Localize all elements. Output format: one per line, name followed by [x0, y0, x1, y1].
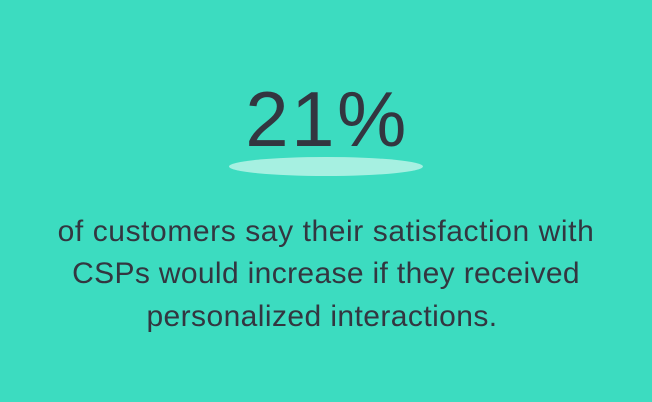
- title: 21% statistic: 21%: [245, 75, 409, 163]
- text block: description: CSPs would increase if they received: [72, 257, 580, 290]
- text block: description: of customers say their satisfaction with: [58, 215, 594, 248]
- text block: description: [58, 215, 594, 333]
- highlight ellipse under statistic: [229, 157, 423, 176]
- text block: description: personalized interactions.: [146, 300, 498, 333]
